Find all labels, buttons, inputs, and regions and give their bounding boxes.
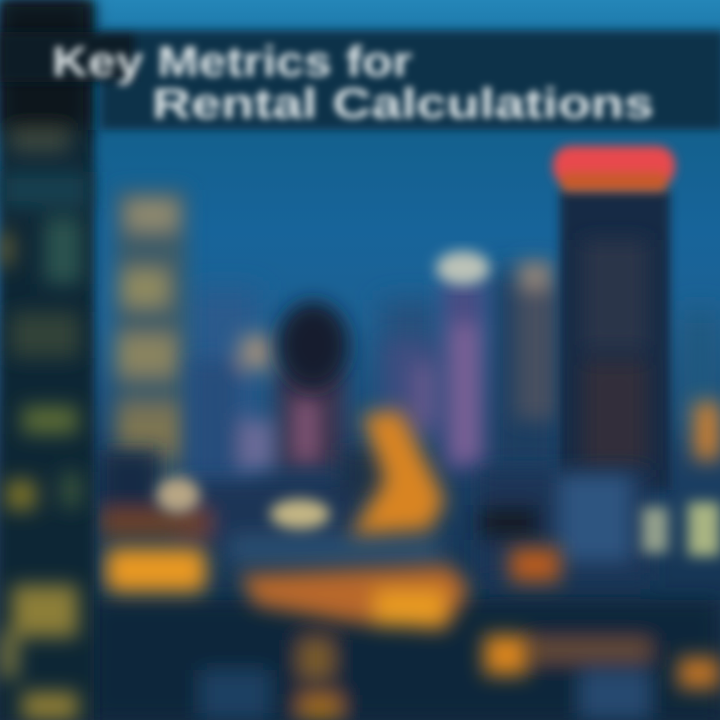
icon: red crown of tower [553, 146, 675, 192]
foreground: lower city [90, 450, 720, 720]
building: dark left tower [0, 0, 94, 720]
lights: pale highlights [156, 477, 720, 556]
windows of dark tower [582, 240, 648, 470]
title band [0, 30, 720, 130]
glow: orange street lights [106, 402, 720, 689]
dome: dark rounded tower top [277, 301, 349, 389]
title text: Key Metrics for [52, 38, 412, 86]
dome: pale tower top [436, 251, 490, 285]
building: central towers [190, 262, 557, 490]
distant skyline towers [190, 270, 720, 490]
title text [52, 38, 654, 128]
building: dark tower with red crown [560, 190, 670, 490]
title text: Rental Calculations [152, 80, 654, 128]
building: tall tan tower [116, 190, 186, 480]
windows of left tower [0, 0, 90, 720]
